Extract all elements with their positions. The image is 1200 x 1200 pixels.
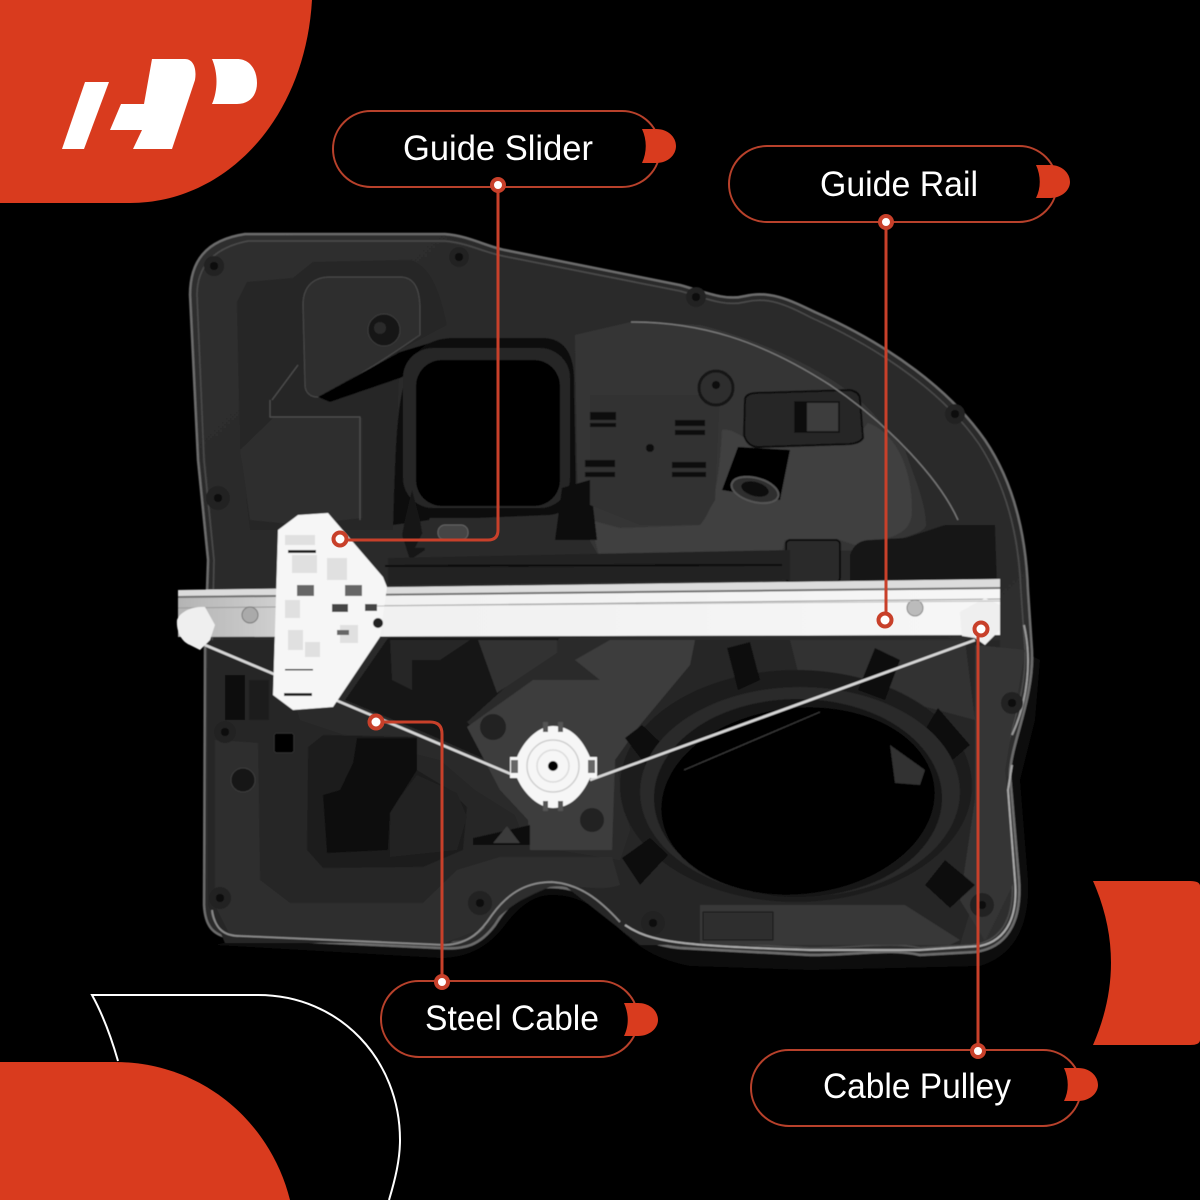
bottom interior band: [700, 905, 960, 945]
callout cap: [1064, 1068, 1098, 1101]
speaker hole: [652, 694, 944, 908]
cables: [205, 640, 975, 780]
flap post: [368, 314, 400, 346]
speaker ring tabs: [622, 642, 975, 908]
right pulley: [960, 598, 1000, 645]
slider slots: [284, 550, 316, 696]
screw bosses: [204, 247, 1023, 935]
panel rim line: [197, 241, 1025, 948]
rectangular bracket: [744, 390, 863, 447]
callout cap: [1036, 165, 1070, 198]
step shape: [390, 640, 470, 690]
curved outer band line: [631, 322, 958, 520]
right bright seam: [1012, 625, 1028, 735]
slider: [273, 513, 1000, 710]
left slots: [225, 675, 245, 720]
door panel: [177, 234, 1040, 970]
panel shadow edge: [215, 640, 1040, 970]
window hole: [416, 360, 560, 506]
speaker ring inner: [640, 687, 960, 897]
decorative white outline: [92, 995, 400, 1200]
left pulley: [177, 607, 215, 650]
gray plate: [467, 640, 695, 850]
right lighter wall: [960, 645, 1025, 940]
leader lines: [340, 185, 978, 1051]
callout: Guide Rail: [729, 146, 1070, 222]
raised flap: [303, 277, 420, 397]
label text: Steel Cable: [425, 999, 599, 1038]
dark funnel: [722, 447, 790, 500]
decorative corner: top-left red shape: [0, 0, 312, 203]
speaker ring outer: [620, 670, 972, 902]
callout: Guide Slider: [333, 111, 676, 187]
logo: [62, 59, 257, 149]
label text: Guide Slider: [403, 129, 593, 168]
bottom bright seam: [625, 765, 1016, 950]
ring bump: [890, 745, 925, 785]
center clip surface: [590, 395, 720, 525]
left pocket: [307, 735, 467, 868]
square boss: [786, 540, 840, 582]
guide rail: [178, 579, 1000, 637]
oval clip: [438, 525, 468, 540]
lower panel field: [208, 640, 1000, 945]
triangle braces: [473, 825, 530, 845]
callout cap: [624, 1003, 658, 1036]
gray panel: [478, 640, 557, 693]
upper right patch: [790, 640, 975, 720]
upper center light panel: [575, 322, 926, 558]
right recess: [850, 525, 997, 582]
callout: Steel Cable: [381, 981, 658, 1057]
label text: Guide Rail: [820, 165, 978, 204]
dark wedge: [345, 638, 560, 775]
callout cap: [642, 129, 676, 163]
window hole ring: [403, 348, 570, 508]
lower left wall band: [215, 740, 620, 945]
window hole outer: [393, 338, 576, 525]
dark flap shadow: [318, 340, 470, 402]
marker dots: [334, 179, 988, 1057]
box recess: [555, 480, 597, 540]
rear fin: [402, 490, 425, 560]
hub: [510, 722, 597, 811]
slider cable clamp: [332, 604, 377, 612]
inner dark field upper left: [237, 260, 447, 530]
mid step under slider rail: [388, 550, 790, 585]
lower step field: [240, 418, 362, 525]
lower strip below hole: [415, 518, 500, 548]
clip rows: [585, 412, 706, 477]
label text: Cable Pulley: [823, 1067, 1011, 1106]
rail bolts: [242, 607, 258, 623]
decorative right red shape: [1093, 881, 1200, 1045]
knob post: [699, 371, 733, 405]
panel body: [190, 234, 1032, 955]
right gray panel: [590, 423, 912, 560]
screw holes: [210, 253, 1016, 927]
dark inner pocket: [323, 738, 417, 853]
left step outline: [270, 365, 360, 520]
callout: Cable Pulley: [751, 1050, 1098, 1126]
decorative corner: bottom-left red shape: [0, 1062, 290, 1200]
right lobe: [390, 775, 467, 857]
